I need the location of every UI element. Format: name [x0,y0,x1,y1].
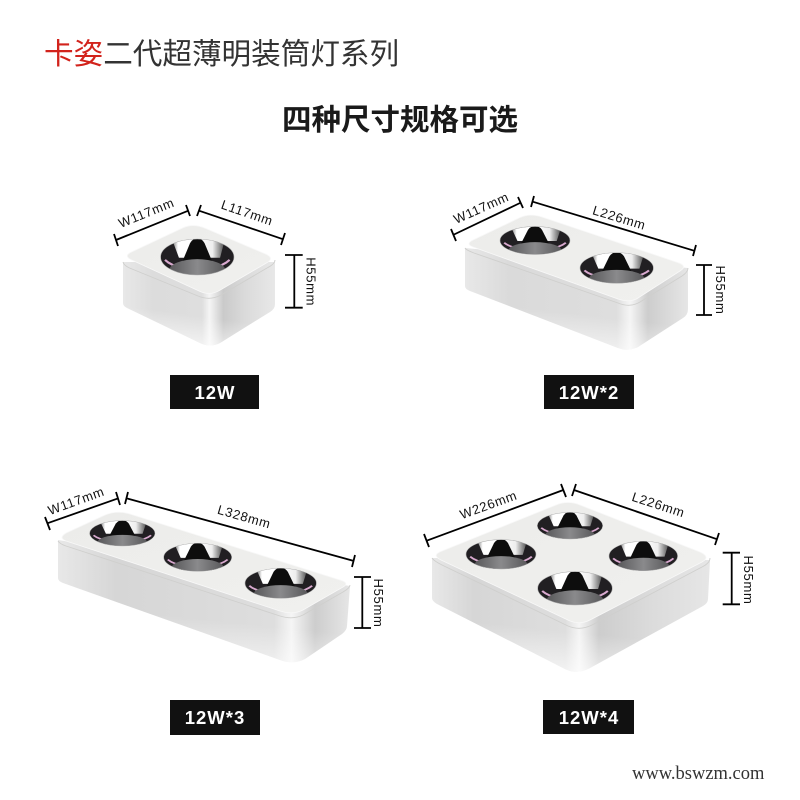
product: 12W*2 double downlight [465,215,688,350]
dimensions: 12W: L117mm [219,197,275,229]
label: 12W*2 [544,375,634,409]
label: 12W: 12W [194,382,236,403]
label: 12W*4: 12W*4 [559,707,619,728]
dimensions: 12W*2: H55mm [713,265,728,315]
dimensions: 12W*4: H55mm [741,555,756,605]
label: 12W [170,375,259,409]
label: 12W*3: 12W*3 [185,707,245,728]
lens [500,226,570,259]
label: 12W*4 [543,700,634,734]
dimensions: 12W: W117mm [116,195,176,231]
dimensions: 12W*2: W117mm [451,189,511,227]
lens [580,252,653,288]
dimensions: 12W*3: L328mm [216,502,273,531]
lens [164,543,232,576]
dimensions: 12W*3: W117mm [46,484,106,518]
lens [161,238,234,281]
lens [466,539,536,574]
dimensions: 12W*2: L226mm [591,203,648,233]
title: 卡姿二代超薄明装筒灯系列 [44,38,399,71]
lens [245,568,316,603]
dimensions: 12W*4: W226mm [458,487,519,522]
dimensions: 12W [114,195,318,308]
dimensions: 12W*3: H55mm [371,578,386,628]
label: 12W*3 [170,700,260,735]
dimensions: 12W*4 [424,484,756,605]
lens [609,541,678,575]
lens [538,571,612,610]
subtitle heading: 四种尺寸规格可选 [282,104,518,137]
product: 12W single downlight [123,226,275,346]
product: 12W*4 quad downlight [432,502,710,672]
dimensions: 12W*4: L226mm [630,489,687,520]
lens [537,512,603,543]
dimensions: 12W: H55mm [304,257,318,306]
dimensions: 12W*3 [45,484,386,628]
website watermark: www.bswzm.com [632,764,765,784]
label: 12W*2: 12W*2 [559,382,619,403]
dimensions: 12W*2 [451,189,728,315]
product: 12W*3 triple downlight [58,512,350,662]
lens [90,520,155,550]
